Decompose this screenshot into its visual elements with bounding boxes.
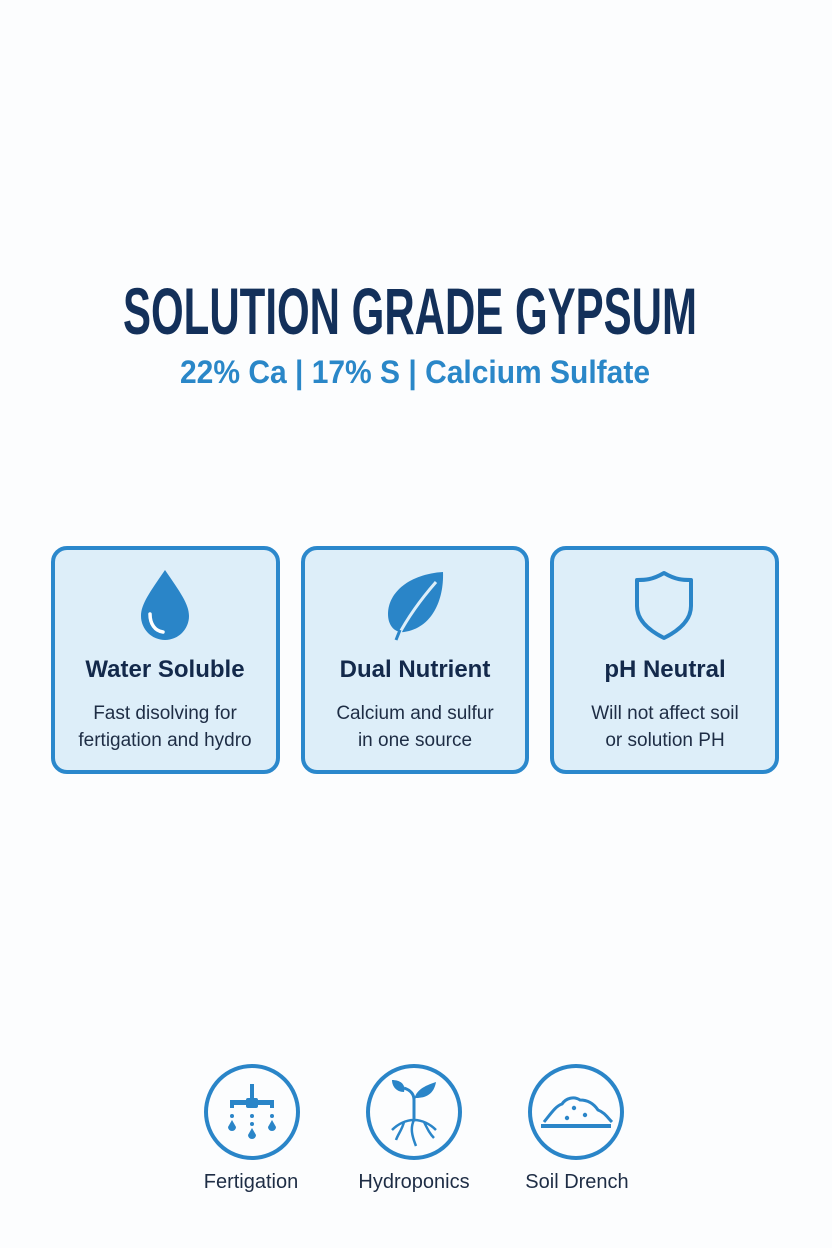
subtitle: 22% Ca | 17% S | Calcium Sulfate bbox=[180, 354, 650, 390]
icon: hydroponics bbox=[368, 1066, 460, 1158]
heading: Dual Nutrient bbox=[340, 656, 490, 683]
text: Will not affect soil bbox=[591, 703, 739, 724]
icon: fertigation bbox=[206, 1066, 298, 1158]
heading: Water Soluble bbox=[85, 656, 245, 683]
label: soil drench: Soil Drench bbox=[525, 1171, 629, 1193]
text: Calcium and sulfur bbox=[336, 703, 494, 724]
icon: soil drench bbox=[530, 1066, 622, 1158]
panel: pH neutral bbox=[552, 548, 777, 772]
panel: pH neutral: or solution PH bbox=[605, 730, 725, 751]
heading: pH Neutral bbox=[604, 656, 726, 683]
icon: shield bbox=[637, 573, 691, 638]
icon: water drop bbox=[141, 570, 189, 640]
icon: leaf bbox=[388, 572, 443, 640]
label: hydroponics: Hydroponics bbox=[358, 1171, 470, 1193]
text: Fast disolving for bbox=[93, 703, 237, 724]
panel: water soluble bbox=[53, 548, 278, 772]
panel: water soluble: fertigation and hydro bbox=[78, 730, 252, 751]
panel: dual nutrient: in one source bbox=[358, 730, 472, 751]
label: fertigation: Fertigation bbox=[204, 1171, 298, 1193]
panel: dual nutrient bbox=[303, 548, 527, 772]
